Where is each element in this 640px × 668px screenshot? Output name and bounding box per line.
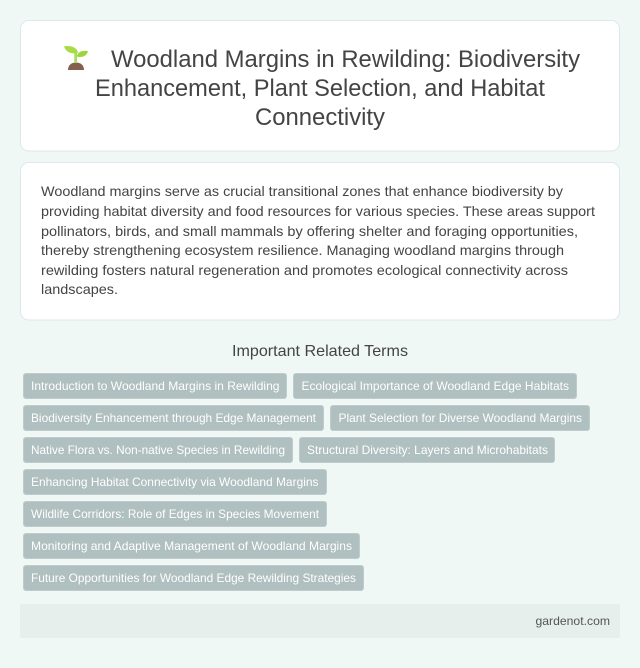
tag: Biodiversity Enhancement through Edge Management bbox=[31, 411, 317, 425]
tag: Introduction to Woodland Margins in Rewilding bbox=[31, 379, 280, 393]
heading: title: Enhancement, Plant Selection, and Habitat bbox=[95, 75, 545, 102]
text block: description paragraph: thereby strengthening ecosystem resilience. Managing woodland margins through bbox=[41, 242, 564, 258]
tag bbox=[24, 502, 326, 526]
tag: Wildlife Corridors: Role of Edges in Species Movement bbox=[31, 507, 320, 521]
tag: Enhancing Habitat Connectivity via Woodland Margins bbox=[31, 475, 318, 489]
tag bbox=[24, 438, 292, 462]
text block: description paragraph: Woodland margins serve as crucial transitional zones that enhance biodiversity by bbox=[41, 183, 563, 199]
text block: description paragraph bbox=[41, 183, 595, 297]
tag: Structural Diversity: Layers and Microhabitats bbox=[307, 443, 548, 457]
tag list bbox=[24, 374, 590, 590]
tag bbox=[24, 374, 286, 398]
tag bbox=[24, 534, 360, 558]
panel: title card bbox=[20, 20, 620, 151]
tag: Monitoring and Adaptive Management of Woodland Margins bbox=[31, 539, 352, 553]
text block: description paragraph: rewilding fosters natural regeneration and promotes ecological connectivity across bbox=[41, 262, 568, 278]
footer bbox=[20, 604, 620, 638]
tag: Future Opportunities for Woodland Edge Rewilding Strategies bbox=[31, 571, 356, 585]
tag bbox=[24, 406, 324, 430]
tag: Ecological Importance of Woodland Edge Habitats bbox=[302, 379, 569, 393]
tag bbox=[24, 566, 364, 590]
tag: Plant Selection for Diverse Woodland Margins bbox=[338, 411, 582, 425]
tag bbox=[294, 374, 576, 398]
heading: title: Woodland Margins in Rewilding: Biodiversity bbox=[111, 46, 580, 73]
panel: description bbox=[20, 162, 620, 320]
text block: description paragraph: pollinators, birds, and small mammals by offering shelter and foraging opportunities, bbox=[41, 223, 578, 239]
text block: description paragraph: landscapes. bbox=[41, 281, 118, 297]
icon: seedling bbox=[64, 46, 88, 70]
footer text: site name: gardenot.com bbox=[536, 614, 610, 628]
heading: important related terms: Important Related Terms bbox=[232, 343, 408, 360]
tag bbox=[300, 438, 554, 462]
heading: title bbox=[95, 46, 580, 131]
tag bbox=[330, 406, 590, 430]
tag bbox=[24, 470, 326, 494]
text block: description paragraph: providing habitat diversity and food resources for various species. These areas support bbox=[41, 203, 595, 219]
heading: title: Connectivity bbox=[255, 104, 385, 131]
tag: Native Flora vs. Non-native Species in Rewilding bbox=[31, 443, 285, 457]
